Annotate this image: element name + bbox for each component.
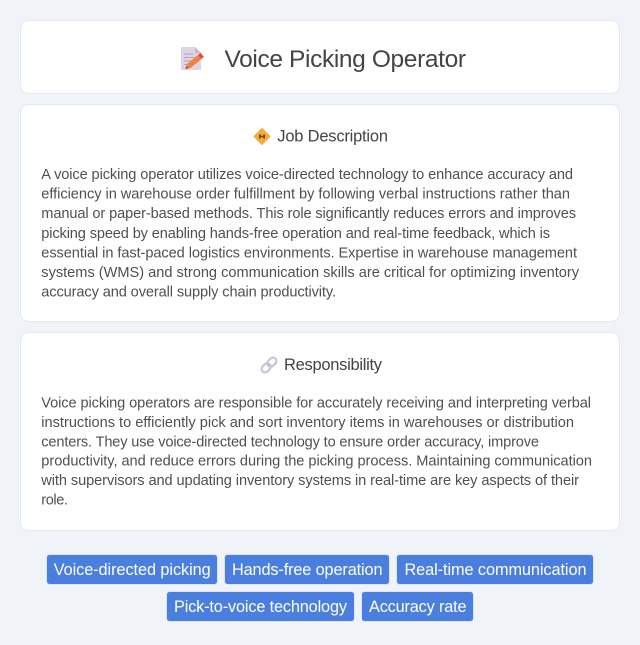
panel: responsibility <box>20 332 620 530</box>
job description paragraph: systems (WMS) and strong communication skills are critical for optimizing inventory <box>41 265 580 281</box>
tag: pick-to-voice technology: Pick-to-voice technology <box>174 598 348 616</box>
icon: document with pencil <box>181 47 204 70</box>
responsibility paragraph: instructions to efficiently pick and sort inventory items in warehouses or distribution <box>41 415 574 431</box>
icon: orange diamond sign <box>254 128 270 144</box>
job description paragraph: essential in fast-paced logistics environments. Expertise in warehouse management <box>41 245 577 261</box>
job description paragraph: accuracy and overall supply chain productivity. <box>41 285 336 301</box>
panel: job description <box>20 104 620 322</box>
job description paragraph: efficiency in warehouse order fulfillment by following verbal instructions rather than <box>41 187 570 203</box>
responsibility paragraph: role. <box>41 492 68 508</box>
panel: title <box>20 20 620 94</box>
job description paragraph: A voice picking operator utilizes voice-directed technology to enhance accuracy and <box>41 167 573 183</box>
job description paragraph <box>41 167 580 301</box>
tag: pick-to-voice technology <box>166 592 354 622</box>
tag: voice-directed picking: Voice-directed picking <box>54 561 211 579</box>
job description paragraph: manual or paper-based methods. This role significantly reduces errors and improves <box>41 206 576 222</box>
responsibility paragraph: Voice picking operators are responsible for accurately receiving and interpreting verbal <box>41 396 591 412</box>
tag: real-time communication <box>396 554 594 584</box>
heading: job description: Job Description <box>277 128 388 146</box>
responsibility paragraph: with supervisors and updating inventory systems in real-time are key aspects of their <box>40 473 579 489</box>
responsibility paragraph: centers. They use voice-directed technology to ensure order accuracy, improve <box>41 434 539 450</box>
job description paragraph: picking speed by enabling hands-free operation and real-time feedback, which is <box>41 226 550 242</box>
heading: responsibility: Responsibility <box>284 356 383 374</box>
responsibility paragraph <box>40 396 592 508</box>
title text: Voice Picking Operator <box>224 46 466 73</box>
tag: accuracy rate: Accuracy rate <box>369 598 466 616</box>
tag: hands-free operation <box>224 554 390 584</box>
tag: real-time communication: Real-time communication <box>404 561 586 579</box>
tags <box>46 554 594 622</box>
tag: accuracy rate <box>362 592 474 622</box>
tag: voice-directed picking <box>46 554 218 584</box>
responsibility paragraph: productivity, and reduce errors during the picking process. Maintaining communication <box>41 454 592 470</box>
icon: chain link <box>260 356 278 374</box>
tag: hands-free operation: Hands-free operation <box>232 561 382 579</box>
